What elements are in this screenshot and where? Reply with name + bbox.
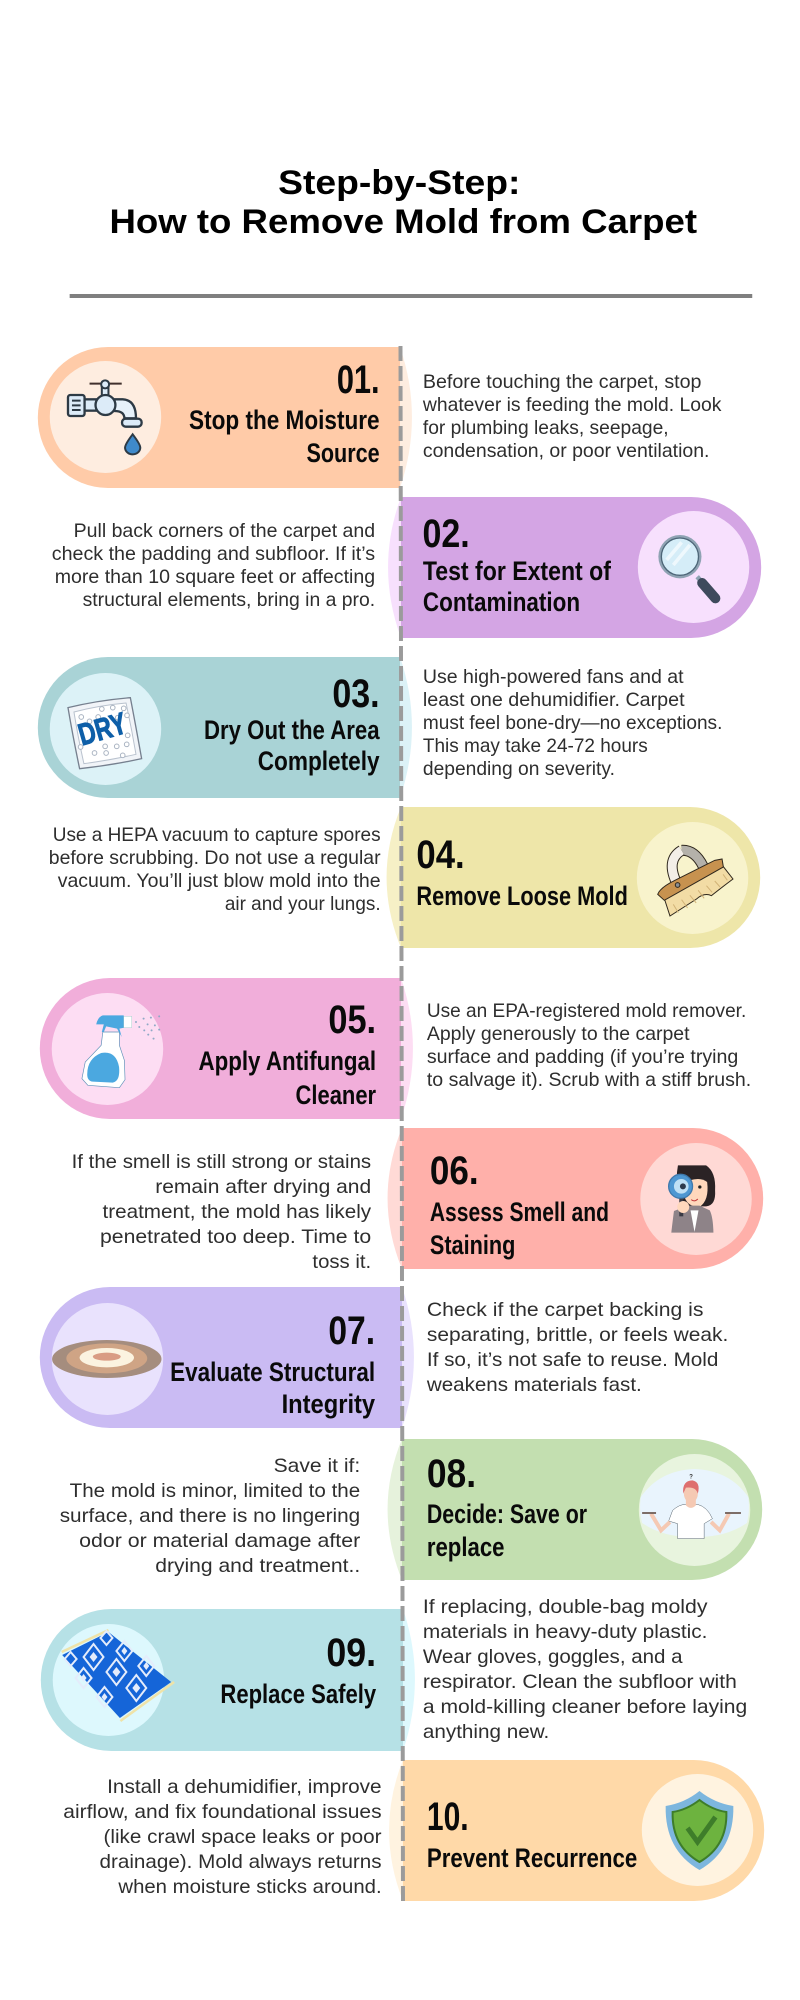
text block: step 08 description: drying and treatment.. bbox=[155, 1556, 360, 1577]
text block: step 10 description: airflow, and fix foundational issues bbox=[63, 1802, 382, 1823]
step number: 01. bbox=[337, 358, 380, 402]
step heading bbox=[423, 556, 612, 617]
icon: patterned rug bbox=[62, 1630, 174, 1721]
step heading bbox=[170, 1357, 375, 1419]
text block: step 03 description: This may take 24-72 hours bbox=[423, 736, 648, 757]
panel: step 03 bbox=[38, 657, 412, 798]
text block: step 06 description bbox=[72, 1152, 372, 1273]
panel: step 01 bbox=[38, 347, 412, 488]
text block: step 09 description bbox=[423, 1597, 747, 1743]
text block: step 09 description: materials in heavy-duty plastic. bbox=[423, 1622, 707, 1643]
text block: step 09 description: respirator. Clean the subfloor with bbox=[423, 1672, 737, 1693]
panel: step 05 bbox=[40, 978, 413, 1119]
text block: step 10 description: drainage). Mold always returns bbox=[100, 1852, 382, 1873]
step heading bbox=[427, 1499, 587, 1562]
text block: step 10 description: when moisture sticks around. bbox=[117, 1877, 382, 1898]
step heading: Stop the Moisture bbox=[189, 405, 380, 435]
step heading: Source bbox=[306, 438, 380, 468]
step number: 10. bbox=[427, 1795, 469, 1839]
text block: step 01 description: condensation, or poor ventilation. bbox=[423, 441, 709, 462]
text block: step 03 description bbox=[423, 667, 722, 780]
text block: step 01 description bbox=[422, 372, 722, 462]
step heading bbox=[189, 405, 380, 468]
step heading: Dry Out the Area bbox=[204, 715, 380, 745]
panel: step 08 bbox=[388, 1439, 762, 1580]
step heading: Staining bbox=[430, 1230, 515, 1260]
step number: 05. bbox=[328, 998, 376, 1042]
text block: step 03 description: must feel bone-dry—no exceptions. bbox=[423, 713, 722, 734]
title: How to Remove Mold from Carpet bbox=[109, 203, 697, 241]
text block: step 04 description: air and your lungs. bbox=[225, 894, 381, 915]
panel: step 09 bbox=[41, 1609, 415, 1751]
text block: step 01 description: Before touching the carpet, stop bbox=[423, 372, 701, 393]
text block: step 03 description: least one dehumidifier. Carpet bbox=[423, 690, 685, 711]
text block: step 09 description: Wear gloves, goggles, and a bbox=[423, 1647, 683, 1668]
step heading: Remove Loose Mold bbox=[416, 881, 628, 911]
icon: DRY desiccant packet bbox=[68, 698, 142, 769]
text block: step 09 description: If replacing, double-bag moldy bbox=[423, 1597, 708, 1618]
step number: 03. bbox=[332, 672, 380, 716]
panel: step 04 bbox=[387, 807, 760, 948]
text block: step 05 description bbox=[427, 1001, 751, 1091]
text block: step 05 description: surface and padding (if you’re trying bbox=[427, 1047, 738, 1068]
text block: step 02 description: check the padding and subfloor. If it’s bbox=[52, 544, 375, 565]
step number: 07. bbox=[328, 1309, 375, 1353]
icon: magnifying glass bbox=[658, 535, 715, 598]
step heading: Cleaner bbox=[296, 1080, 377, 1110]
text block: step 10 description bbox=[63, 1777, 382, 1898]
text block: step 02 description bbox=[52, 521, 375, 611]
text block: step 02 description: more than 10 square feet or affecting bbox=[55, 567, 375, 588]
text block: step 02 description: Pull back corners of the carpet and bbox=[74, 521, 375, 542]
panel: step 06 bbox=[388, 1128, 763, 1269]
step heading: Contamination bbox=[423, 587, 580, 617]
step heading: Apply Antifungal bbox=[199, 1046, 376, 1076]
text block: step 06 description: treatment, the mold has likely bbox=[102, 1202, 372, 1223]
text block: step 08 description: odor or material damage after bbox=[79, 1531, 360, 1552]
text block: step 01 description: whatever is feeding the mold. Look bbox=[422, 395, 722, 416]
text block: step 04 description: Use a HEPA vacuum to capture spores bbox=[53, 825, 381, 846]
text block: step 03 description: depending on severity. bbox=[423, 759, 615, 780]
text block: step 06 description: toss it. bbox=[312, 1252, 371, 1273]
text block: step 04 description: vacuum. You’ll just blow mold into the bbox=[58, 871, 381, 892]
step number: 06. bbox=[430, 1149, 479, 1193]
text block: step 06 description: If the smell is still strong or stains bbox=[72, 1152, 371, 1173]
text block: step 05 description: Apply generously to the carpet bbox=[427, 1024, 690, 1045]
step number: 09. bbox=[326, 1631, 376, 1675]
text block: step 07 description: weakens materials fast. bbox=[426, 1375, 642, 1396]
icon: DRY desiccant packet: DRY bbox=[74, 706, 130, 752]
icon: dripping faucet bbox=[68, 380, 142, 454]
step heading: Evaluate Structural bbox=[170, 1357, 375, 1387]
step heading: Integrity bbox=[282, 1389, 375, 1419]
text block: step 09 description: a mold-killing cleaner before laying bbox=[423, 1697, 747, 1718]
icon: shrugging person bbox=[640, 1469, 749, 1539]
text block: step 10 description: Install a dehumidifier, improve bbox=[107, 1777, 382, 1798]
step heading bbox=[204, 715, 380, 776]
icon: shield with check bbox=[666, 1791, 733, 1870]
text block: step 08 description: surface, and there is no lingering bbox=[60, 1506, 360, 1527]
panel: step 02 bbox=[388, 497, 761, 638]
step heading bbox=[430, 1197, 609, 1260]
step heading: Decide: Save or bbox=[427, 1499, 587, 1529]
step heading: replace bbox=[427, 1532, 504, 1562]
step heading: Completely bbox=[258, 746, 380, 776]
step number: 02. bbox=[422, 512, 470, 556]
icon: woman with magnifier bbox=[669, 1165, 715, 1233]
text block: step 08 description: The mold is minor, limited to the bbox=[70, 1481, 360, 1502]
text block: step 07 description bbox=[426, 1300, 728, 1396]
title: Step-by-Step: bbox=[278, 164, 520, 202]
step number: 08. bbox=[427, 1452, 476, 1496]
text block: step 04 description: before scrubbing. Do not use a regular bbox=[49, 848, 381, 869]
icon: round rug bbox=[52, 1340, 162, 1378]
text block: step 10 description: (like crawl space leaks or poor bbox=[103, 1827, 382, 1848]
icon: shrugging person: ? bbox=[689, 1474, 693, 1480]
step heading: Replace Safely bbox=[220, 1679, 376, 1709]
text block: step 08 description bbox=[60, 1456, 360, 1577]
icon: spray bottle bbox=[82, 1015, 160, 1088]
text block: step 06 description: penetrated too deep. Time to bbox=[100, 1227, 371, 1248]
panel: step 07 bbox=[40, 1287, 414, 1428]
icon: scrub brush bbox=[658, 850, 733, 916]
text block: step 08 description: Save it if: bbox=[274, 1456, 360, 1477]
step heading: Prevent Recurrence bbox=[427, 1843, 637, 1873]
text block: step 01 description: for plumbing leaks, seepage, bbox=[423, 418, 669, 439]
step heading: Test for Extent of bbox=[423, 556, 612, 586]
step heading bbox=[199, 1046, 377, 1110]
text block: step 04 description bbox=[49, 825, 381, 915]
panel: step 10 bbox=[389, 1760, 764, 1901]
text block: step 09 description: anything new. bbox=[423, 1722, 549, 1743]
text block: step 07 description: Check if the carpet backing is bbox=[427, 1300, 703, 1321]
text block: step 06 description: remain after drying and bbox=[155, 1177, 371, 1198]
text block: step 05 description: to salvage it). Scrub with a stiff brush. bbox=[427, 1070, 751, 1091]
step heading: Assess Smell and bbox=[430, 1197, 609, 1227]
text block: step 03 description: Use high-powered fans and at bbox=[423, 667, 684, 688]
text block: step 07 description: If so, it’s not safe to reuse. Mold bbox=[427, 1350, 718, 1371]
text block: step 05 description: Use an EPA-registered mold remover. bbox=[427, 1001, 746, 1022]
text block: step 07 description: separating, brittle, or feels weak. bbox=[427, 1325, 728, 1346]
text block: step 02 description: structural elements, bring in a pro. bbox=[83, 590, 375, 611]
step number: 04. bbox=[416, 833, 465, 877]
title bbox=[109, 164, 697, 241]
